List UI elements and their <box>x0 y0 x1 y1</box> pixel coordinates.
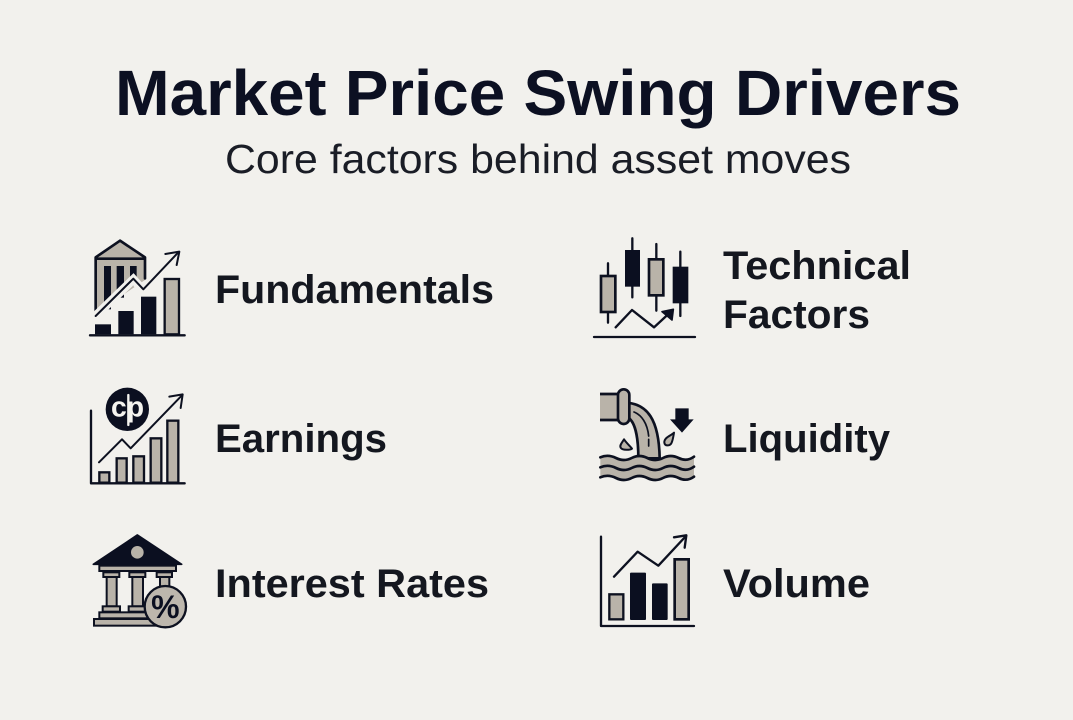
label: Technical Factors: Technical <box>723 244 911 288</box>
item: Liquidity <box>600 389 891 480</box>
label: Earnings: Earnings <box>215 417 387 461</box>
item: Technical Factors: Factors <box>723 293 870 337</box>
item: Volume <box>601 535 870 626</box>
label: Liquidity: Liquidity <box>723 417 891 461</box>
item: Technical Factors <box>594 238 911 337</box>
icon: draining pipe with waves and down arrow <box>600 389 694 480</box>
item: Interest Rates <box>93 535 489 627</box>
label: Volume: Volume <box>723 562 870 606</box>
label: Interest Rates: Interest Rates <box>215 562 489 606</box>
icon: bank with percent badge <box>93 535 186 627</box>
subtitle: Core factors behind asset moves <box>225 136 851 182</box>
icon: volume bar chart <box>601 535 694 626</box>
icon: bank building with rising bars <box>90 241 185 335</box>
label: Fundamentals: Fundamentals <box>215 268 494 312</box>
item: Fundamentals <box>90 241 494 335</box>
icon: bank with percent badge: % <box>151 589 180 625</box>
icon: candlesticks <box>594 238 695 337</box>
title: Market Price Swing Drivers <box>115 57 961 129</box>
icon: coin with bar chart <box>91 388 185 483</box>
item: Earnings <box>91 388 387 483</box>
icon: coin with bar chart: cp <box>111 392 144 424</box>
